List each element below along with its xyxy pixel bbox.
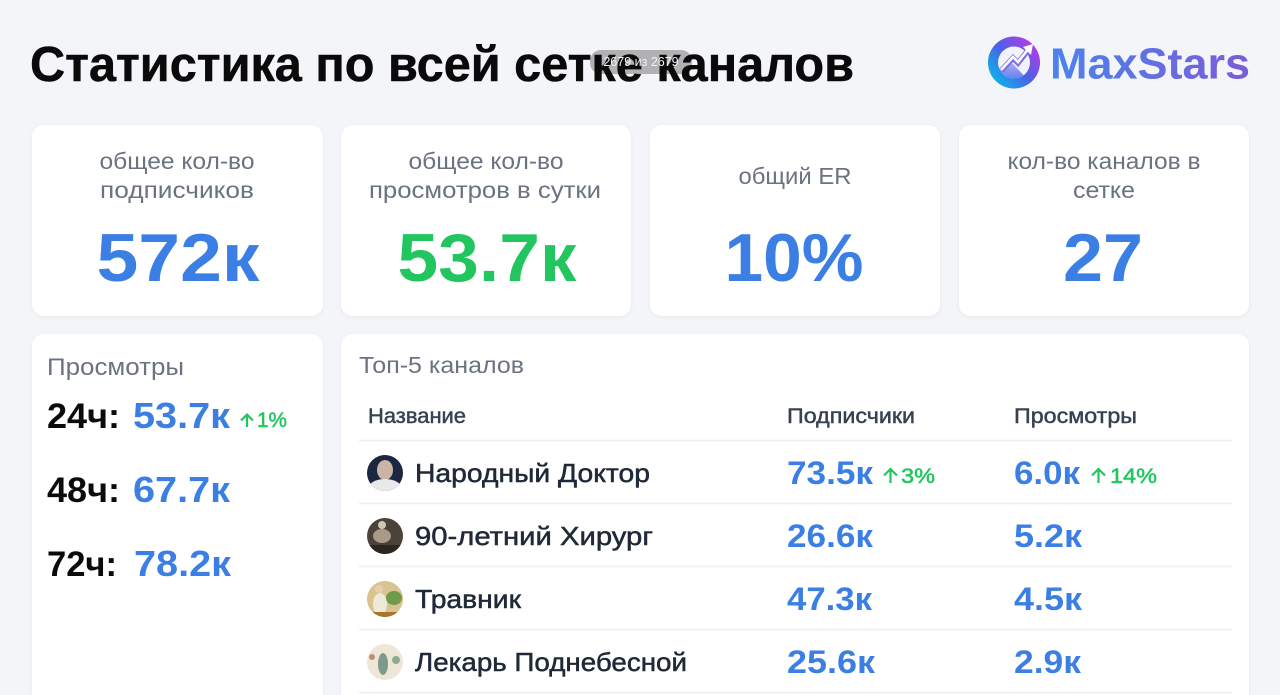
row: Лекарь Поднебесной: 2.9к — [1014, 644, 1082, 680]
counter pill background — [590, 50, 692, 74]
icon: logo ring with rising arrow — [988, 36, 1040, 88]
row: 24h: 53.7к — [133, 395, 231, 436]
row: 24h — [47, 395, 287, 436]
row: Народный Доктор: 3% — [901, 465, 935, 488]
panel: daily views — [341, 125, 631, 316]
table header: Подписчики — [787, 405, 915, 428]
row: Народный Доктор: 73.5к — [787, 455, 874, 491]
row: 48h: 67.7к — [133, 469, 231, 510]
row: 90-летний Хирург: 26.6к — [787, 518, 874, 554]
panel: subscribers — [32, 125, 323, 316]
table header: Просмотры — [1014, 405, 1137, 428]
panel: top 5 channels — [341, 334, 1249, 695]
panel: daily views: 53.7к — [398, 220, 578, 296]
logo — [988, 36, 1250, 88]
avatar: healer — [367, 644, 403, 680]
row: Лекарь Поднебесной: 25.6к — [787, 644, 876, 680]
panel: overall ER: общий ER — [738, 163, 852, 189]
row: 90-летний Хирург — [367, 518, 1083, 554]
row: Травник: Травник — [415, 584, 522, 614]
panel: subscribers: подписчиков — [100, 177, 254, 203]
row: 72h — [47, 543, 232, 584]
title: Статистика по всей сетке каналов — [30, 38, 854, 92]
row: 24h: 24ч: — [47, 397, 120, 436]
row: Народный Доктор — [367, 455, 1156, 491]
table header — [368, 405, 1137, 428]
panel: subscribers: общее кол-во — [100, 148, 254, 174]
panel: daily views: общее кол-во — [408, 148, 564, 174]
row: Народный Доктор: 14% — [1110, 465, 1157, 488]
panel: views by period — [32, 334, 323, 695]
logo wordmark: MaxStars — [1050, 40, 1250, 88]
avatar: surgeon — [367, 518, 403, 554]
row: 72h: 78.2к — [134, 543, 232, 584]
row: 72h: 72ч: — [47, 545, 117, 584]
row: Народный Доктор: 6.0к — [1014, 455, 1081, 491]
row: Травник: 47.3к — [787, 581, 873, 617]
row: 90-летний Хирург: 90-летний Хирург — [415, 521, 653, 551]
row: 24h: 1% — [257, 409, 287, 432]
panel: channel count: сетке — [1073, 177, 1135, 203]
panel: overall ER — [650, 125, 940, 316]
row: Травник: 4.5к — [1014, 581, 1083, 617]
avatar: doctor — [367, 455, 403, 491]
row: 48h: 48ч: — [47, 471, 120, 510]
panel: channel count: 27 — [1063, 220, 1143, 296]
panel: daily views: просмотров в сутки — [369, 177, 601, 203]
panel: subscribers: 572к — [96, 220, 261, 296]
counter pill text: 2679 из 2679 — [603, 55, 679, 69]
panel: channel count: кол-во каналов в — [1008, 148, 1200, 174]
table heading: Топ-5 каналов — [359, 352, 524, 378]
row: 90-летний Хирург: 5.2к — [1014, 518, 1083, 554]
row: Лекарь Поднебесной — [367, 644, 1082, 680]
row: Народный Доктор: Народный Доктор — [415, 458, 650, 488]
panel: overall ER: 10% — [724, 220, 864, 296]
table header: Название — [368, 405, 466, 428]
views heading: Просмотры — [47, 354, 184, 381]
panel: channel count — [959, 125, 1249, 316]
row: Лекарь Поднебесной: Лекарь Поднебесной — [415, 647, 687, 677]
row: 48h — [47, 469, 231, 510]
avatar: herbalist — [367, 581, 403, 617]
row: Травник — [367, 581, 1083, 617]
